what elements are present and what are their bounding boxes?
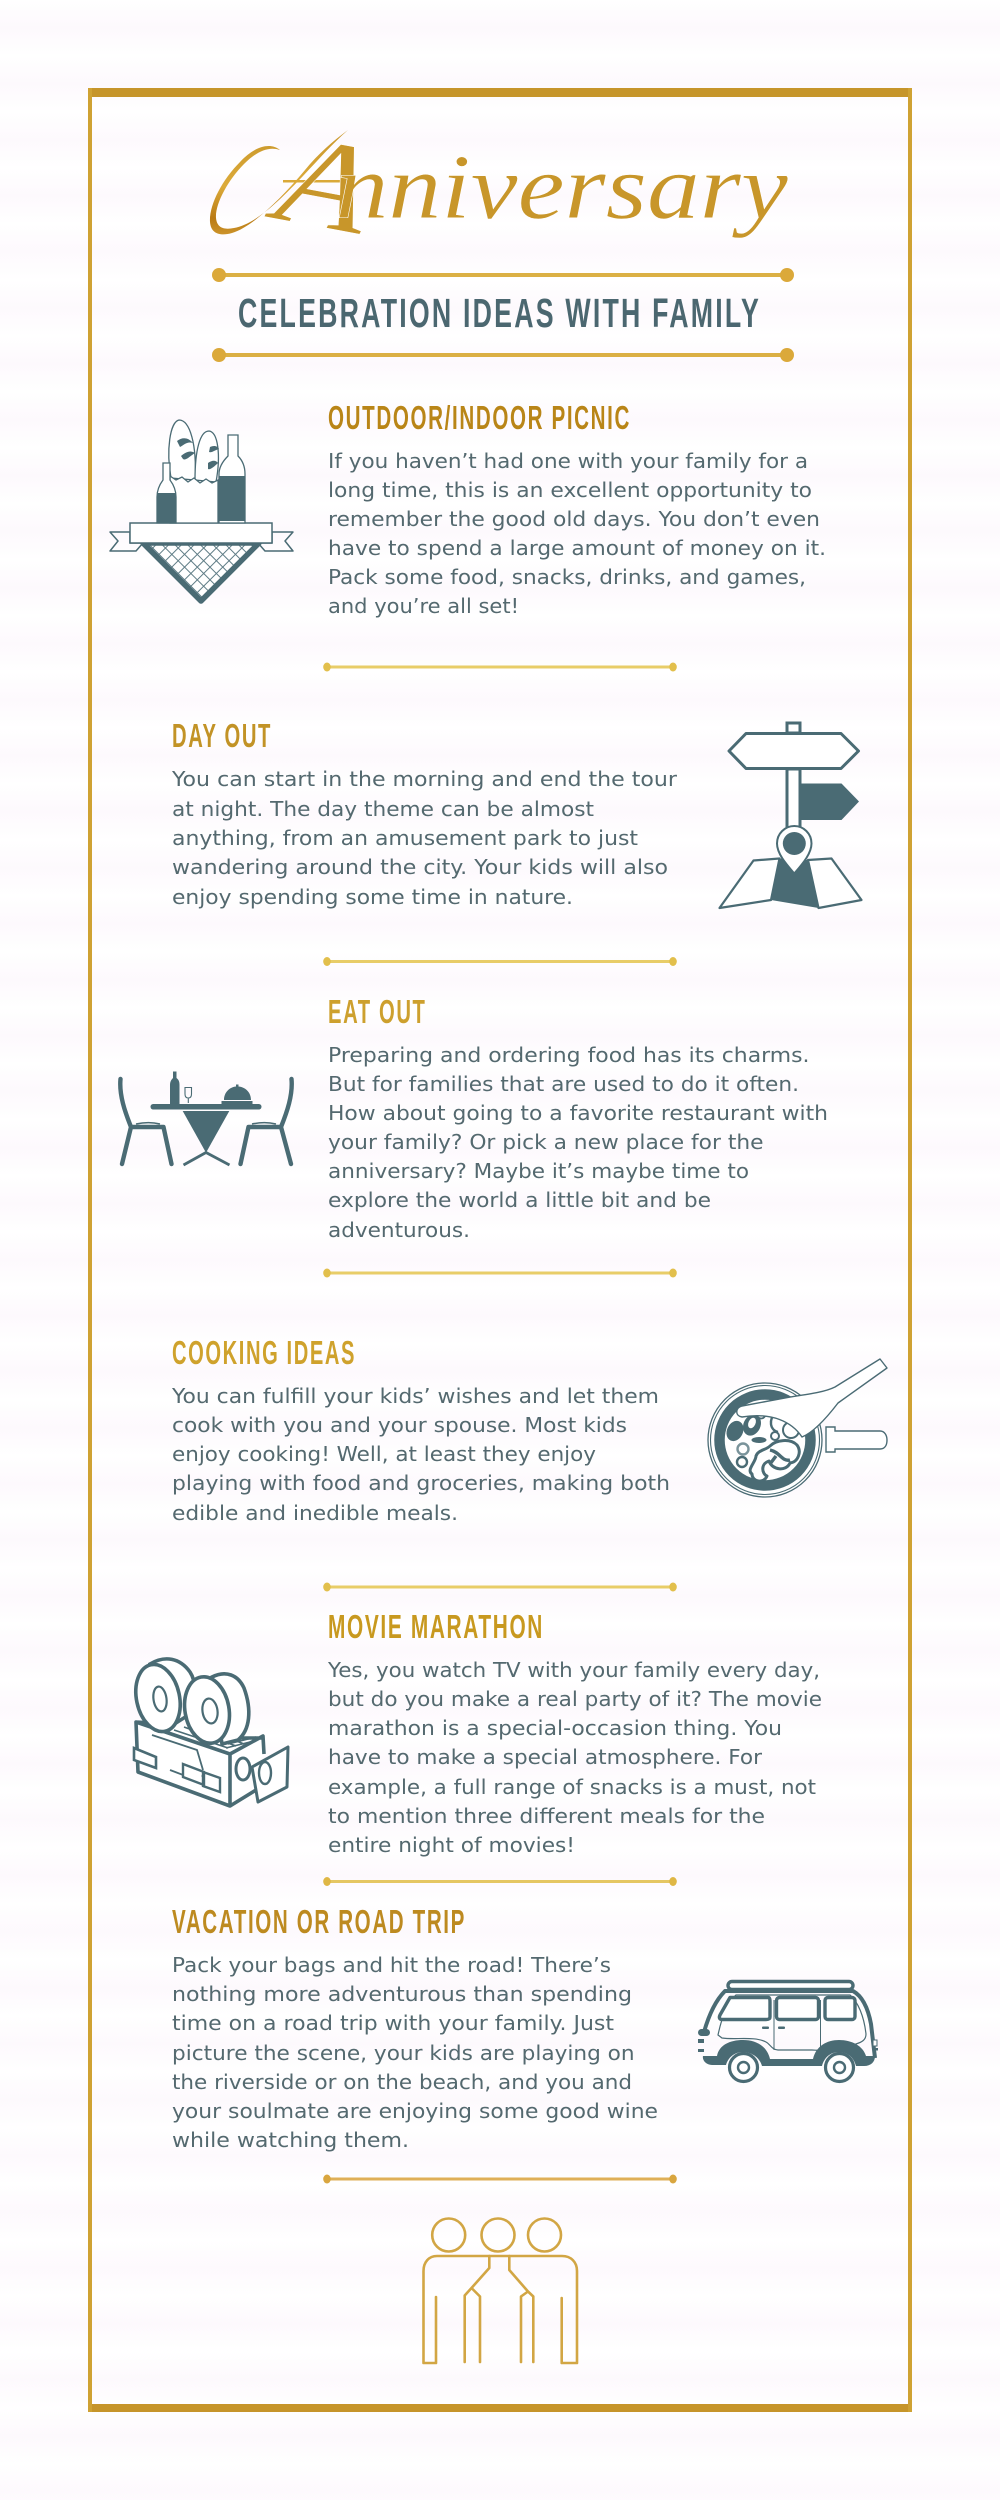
header rule top [212, 268, 794, 282]
heading: picnic: OUTDOOR/INDOOR PICNIC [328, 399, 631, 436]
text: picnic: Pack some food, snacks, drinks, and games, [328, 565, 806, 589]
text: day out: enjoy spending some time in nature. [172, 885, 573, 909]
title: Anniversary [257, 105, 789, 262]
text: cooking ideas: edible and inedible meals. [172, 1501, 458, 1525]
text: picnic: long time, this is an excellent opportunity to [328, 478, 812, 502]
icon: dining table [120, 1072, 292, 1165]
text: day out [171, 767, 678, 909]
icon: picnic basket [110, 420, 293, 601]
icon: camper van [698, 1982, 878, 2082]
text: picnic [328, 449, 826, 618]
text: vacation or road trip: your soulmate are enjoying some good wine [172, 2099, 658, 2123]
large bottle [219, 435, 245, 523]
text: vacation or road trip: time on a road trip with your family. Just [172, 2011, 614, 2035]
text: movie marathon [327, 1658, 822, 1857]
text: cooking ideas: cook with you and your spouse. Most kids [172, 1413, 627, 1437]
text: day out: anything, from an amusement park to just [172, 826, 638, 850]
heading: vacation or road trip: VACATION OR ROAD TRIP [172, 1903, 466, 1940]
small bottle [157, 463, 176, 523]
heading: day out: DAY OUT [172, 717, 272, 754]
divider 6 [323, 2174, 677, 2184]
icon: film camera [130, 1659, 288, 1806]
heading: eat out: EAT OUT [328, 993, 426, 1030]
text: picnic: have to spend a large amount of money on it. [328, 536, 826, 560]
text: vacation or road trip: while watching them. [172, 2128, 409, 2152]
text: day out: wandering around the city. Your kids will also [172, 855, 668, 879]
text: vacation or road trip: Pack your bags and hit the road! There’s [172, 1953, 611, 1977]
divider 5 [323, 1877, 677, 1886]
text: cooking ideas: You can fulfill your kids’ wishes and let them [171, 1384, 659, 1408]
text: cooking ideas: playing with food and groceries, making both [172, 1471, 670, 1495]
text: day out: You can start in the morning and end the tour [171, 767, 678, 791]
text: movie marathon: entire night of movies! [328, 1833, 575, 1857]
food pieces [723, 1410, 799, 1481]
divider 4 [323, 1582, 677, 1592]
text: picnic: remember the good old days. You don’t even [328, 507, 820, 531]
divider 1 [323, 662, 677, 672]
text: vacation or road trip: the riverside or on the beach, and you and [172, 2070, 632, 2094]
page frame [88, 88, 912, 2412]
bread loaves [169, 420, 219, 482]
text: movie marathon: Yes, you watch TV with your family every day, [327, 1658, 820, 1682]
icon: signpost and map [720, 723, 862, 908]
text: movie marathon: to mention three different meals for the [328, 1804, 765, 1828]
text: eat out: adventurous. [328, 1218, 470, 1242]
text: vacation or road trip [172, 1953, 658, 2152]
text: cooking ideas: enjoy cooking! Well, at least they enjoy [172, 1442, 596, 1466]
text: picnic: If you haven’t had one with your family for a [328, 449, 808, 473]
paper bag [170, 476, 218, 523]
heading: cooking ideas: COOKING IDEAS [172, 1334, 356, 1371]
text: eat out: Preparing and ordering food has its charms. [328, 1043, 810, 1067]
text: picnic: and you’re all set! [328, 594, 519, 618]
text: vacation or road trip: nothing more adventurous than spending [172, 1982, 632, 2006]
icon: pan and spatula [708, 1359, 887, 1497]
text: movie marathon: marathon is a special-occasion thing. You [328, 1716, 782, 1740]
divider 2 [323, 957, 677, 966]
text: eat out: your family? Or pick a new place for the [328, 1130, 764, 1154]
text: movie marathon: have to make a special atmosphere. For [328, 1745, 763, 1769]
text: eat out: explore the world a little bit and be [328, 1188, 711, 1212]
header rule bottom [212, 348, 794, 362]
text: vacation or road trip: picture the scene, your kids are playing on [172, 2041, 635, 2065]
divider 3 [323, 1268, 677, 1278]
heading: movie marathon: MOVIE MARATHON [328, 1608, 544, 1645]
text: eat out: How about going to a favorite restaurant with [328, 1101, 828, 1125]
text: movie marathon: example, a full range of snacks is a must, not [328, 1775, 816, 1799]
reels [130, 1659, 249, 1747]
text: eat out: anniversary? Maybe it’s maybe time to [328, 1159, 749, 1183]
text: eat out [328, 1043, 828, 1242]
text: movie marathon: but do you make a real party of it? The movie [328, 1687, 822, 1711]
text: eat out: But for families that are used to do it often. [328, 1072, 799, 1096]
icon: family of three [424, 2218, 577, 2363]
text: day out: at night. The day theme can be almost [172, 797, 594, 821]
text: cooking ideas [171, 1384, 670, 1525]
